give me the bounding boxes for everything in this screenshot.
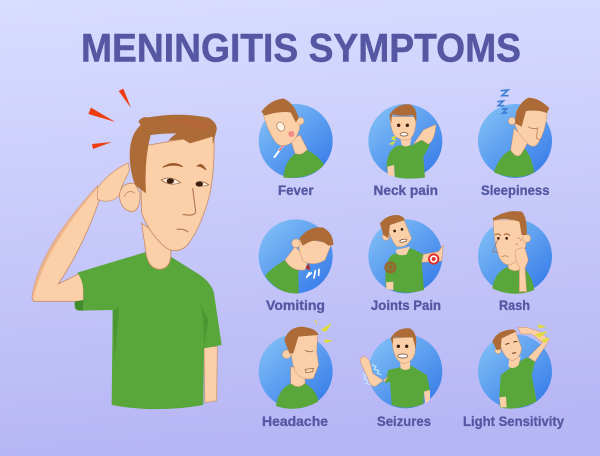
eyes bbox=[161, 178, 209, 187]
face bbox=[140, 133, 214, 251]
label: fever: Fever bbox=[278, 182, 314, 198]
eyebrows bbox=[163, 163, 206, 170]
row 3 icons bbox=[259, 320, 552, 409]
label: vomiting: Vomiting bbox=[266, 297, 325, 313]
hand fingers bbox=[97, 163, 129, 201]
hair bbox=[130, 115, 217, 193]
neck bbox=[142, 223, 171, 269]
label: headache: Headache bbox=[262, 413, 328, 429]
label: seizures: Seizures bbox=[377, 413, 431, 429]
icon: vomiting bbox=[259, 219, 333, 293]
nose and mouth bbox=[177, 188, 196, 232]
row 2 icons bbox=[259, 211, 552, 294]
title: MENINGITIS SYMPTOMS bbox=[81, 26, 521, 70]
main figure: man holding his head bbox=[32, 89, 222, 409]
arm shading bbox=[32, 186, 97, 299]
row 1 icons bbox=[259, 90, 552, 179]
icon: neck pain bbox=[368, 104, 442, 179]
icon: rash bbox=[478, 211, 552, 294]
label: rash: Rash bbox=[499, 297, 530, 313]
label: joints pain: Joints Pain bbox=[371, 297, 441, 313]
label: neck pain: Neck pain bbox=[374, 182, 438, 198]
label: sleepiness: Sleepiness bbox=[481, 182, 550, 198]
icon: fever bbox=[259, 98, 333, 178]
lower arm bbox=[204, 347, 217, 403]
icon: headache bbox=[259, 320, 333, 409]
icon: seizures bbox=[360, 328, 442, 408]
ear bbox=[119, 183, 140, 212]
shirt bbox=[75, 252, 222, 409]
icon: light sensitivity bbox=[478, 325, 552, 409]
pain marks bbox=[88, 89, 131, 149]
icon: sleepiness bbox=[478, 90, 552, 178]
icon: joints pain bbox=[368, 215, 443, 293]
label: light sensitivity: Light Sensitivity bbox=[463, 413, 564, 429]
raised arm bbox=[32, 186, 99, 301]
